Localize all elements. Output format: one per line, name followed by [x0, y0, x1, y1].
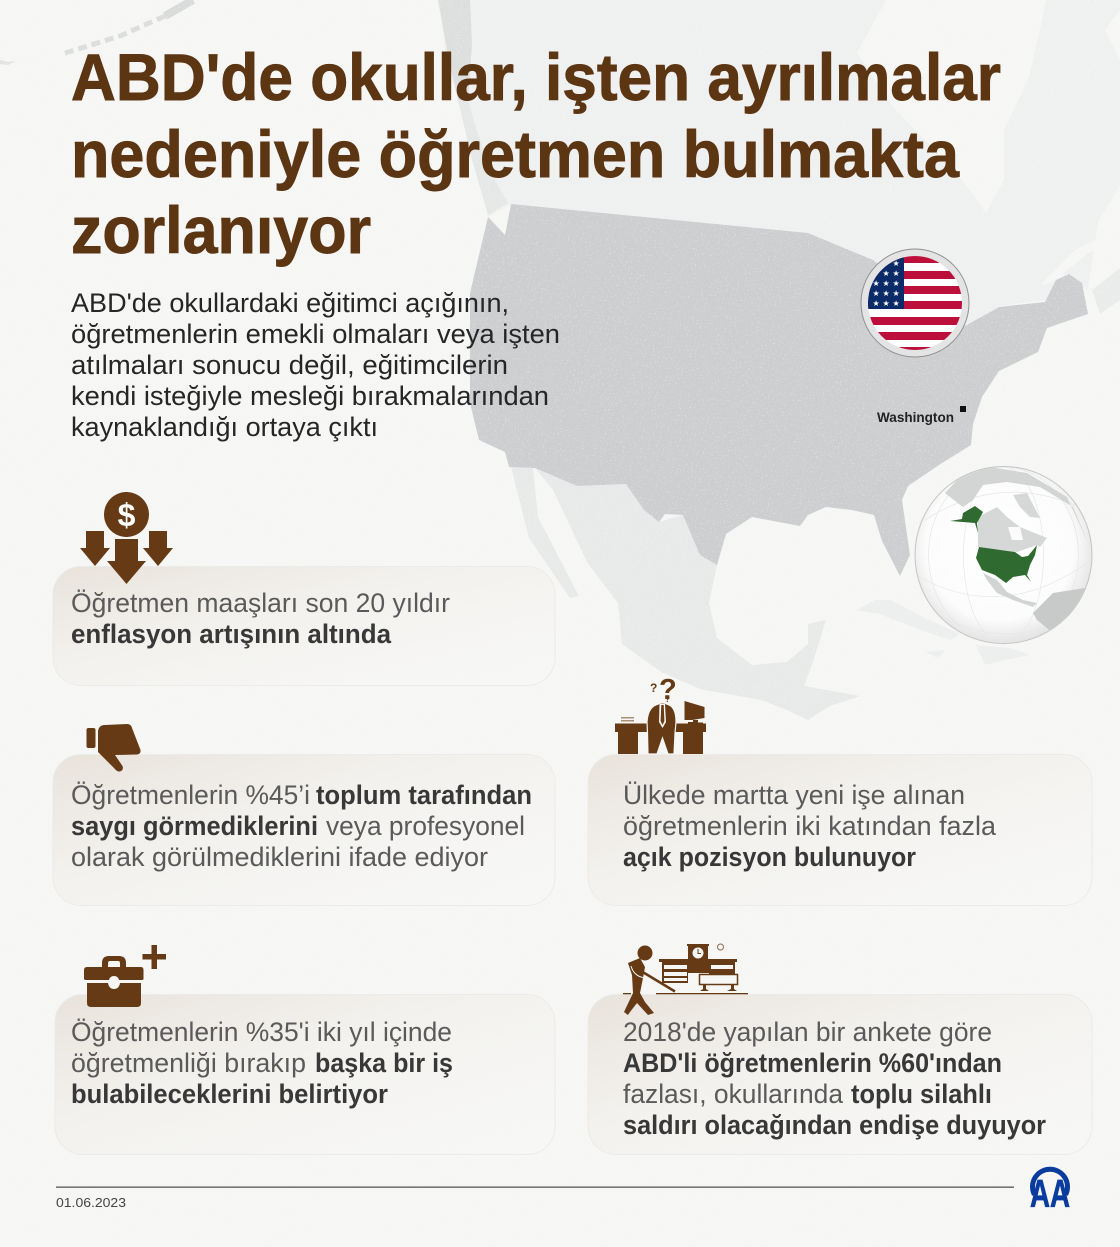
intro text: ABD'de okullardaki eğitimci açığının,	[71, 288, 509, 318]
respect text: toplum tarafından	[316, 780, 532, 810]
other jobs text: öğretmenliği bırakıp	[71, 1048, 306, 1078]
other jobs text: başka bir iş	[315, 1048, 453, 1078]
school shootings text: 2018'de yapılan bir ankete göre	[623, 1017, 992, 1047]
intro text	[71, 288, 560, 442]
Washington marker	[877, 406, 966, 425]
icon: US flag badge: ★	[882, 279, 890, 288]
vacancies text	[623, 780, 997, 872]
icon: puzzled man at desk: ?	[659, 674, 677, 706]
respect text: veya profesyonel	[326, 811, 525, 841]
icon: falling dollar: $	[118, 497, 136, 533]
icon: gunman and school	[623, 944, 748, 1015]
title	[71, 40, 1001, 267]
other jobs text: Öğretmenlerin %35'i iki yıl içinde	[71, 1017, 452, 1047]
panel: salaries	[53, 492, 555, 686]
icon: US flag badge: ★	[892, 259, 900, 268]
salaries text	[71, 588, 450, 649]
panel: other jobs	[55, 945, 555, 1154]
icon: briefcase plus	[84, 945, 166, 1007]
icon: US flag badge: ★	[882, 269, 890, 278]
logo: AA	[1030, 1169, 1070, 1216]
respect text: Öğretmenlerin %45’i	[71, 780, 310, 810]
school shootings text: fazlası, okullarında	[623, 1079, 844, 1109]
icon: US flag badge: ★	[882, 299, 890, 308]
intro text: öğretmenlerin emekli olmaları veya işten	[71, 319, 560, 349]
salaries text: enflasyon artışının altında	[71, 619, 392, 649]
school shootings text: toplu silahlı	[851, 1079, 992, 1109]
respect text: olarak görülmediklerini ifade ediyor	[71, 842, 488, 872]
school shootings text: ABD'li öğretmenlerin %60'ından	[623, 1048, 1002, 1078]
respect text: saygı görmediklerini	[71, 811, 318, 841]
icon: puzzled man at desk	[615, 674, 706, 754]
vacancies text: Ülkede martta yeni işe alınan	[623, 780, 965, 810]
school shootings text	[623, 1017, 1046, 1140]
icon: US flag badge: ★	[882, 289, 890, 298]
panel: respect	[53, 724, 555, 906]
vacancies text: öğretmenlerin iki katından fazla	[623, 811, 997, 841]
icon: falling dollar	[80, 492, 173, 584]
icon: US flag badge: ★	[872, 299, 880, 308]
title: nedeniyle öğretmen bulmakta	[71, 117, 960, 191]
panel: vacancies	[588, 674, 1092, 906]
icon: US flag badge: ★	[892, 279, 900, 288]
other jobs text: bulabileceklerini belirtiyor	[71, 1079, 388, 1109]
title: ABD'de okullar, işten ayrılmalar	[71, 40, 1001, 114]
intro text: kaynaklandığı ortaya çıktı	[71, 412, 378, 442]
intro text: kendi isteğiyle mesleği bırakmalarından	[71, 381, 549, 411]
school shootings text: saldırı olacağından endişe duyuyor	[623, 1110, 1046, 1140]
panel: school shootings	[588, 944, 1092, 1154]
Washington marker: Washington	[877, 410, 954, 425]
title: zorlanıyor	[71, 193, 371, 267]
background map of North America	[0, 0, 1120, 720]
locator globe	[915, 466, 1092, 644]
logo: AA: AA	[1030, 1173, 1070, 1216]
icon: puzzled man at desk: ?	[650, 681, 657, 695]
other jobs text	[71, 1017, 453, 1109]
intro text: atılmaları sonucu değil, eğitimcilerin	[71, 350, 508, 380]
date: 01.06.2023	[56, 1195, 126, 1210]
icon: US flag badge: ★	[892, 289, 900, 298]
respect text	[71, 780, 532, 872]
icon: puzzled man at desk: ?	[665, 695, 670, 704]
salaries text: Öğretmen maaşları son 20 yıldır	[71, 588, 450, 618]
icon: US flag badge: ★	[872, 289, 880, 298]
icon: US flag badge: ★	[892, 269, 900, 278]
icon: thumbs down	[86, 724, 141, 772]
icon: US flag badge: ★	[892, 299, 900, 308]
icon: US flag badge	[860, 249, 970, 357]
vacancies text: açık pozisyon bulunuyor	[623, 842, 916, 872]
icon: US flag badge: ★	[872, 279, 880, 288]
